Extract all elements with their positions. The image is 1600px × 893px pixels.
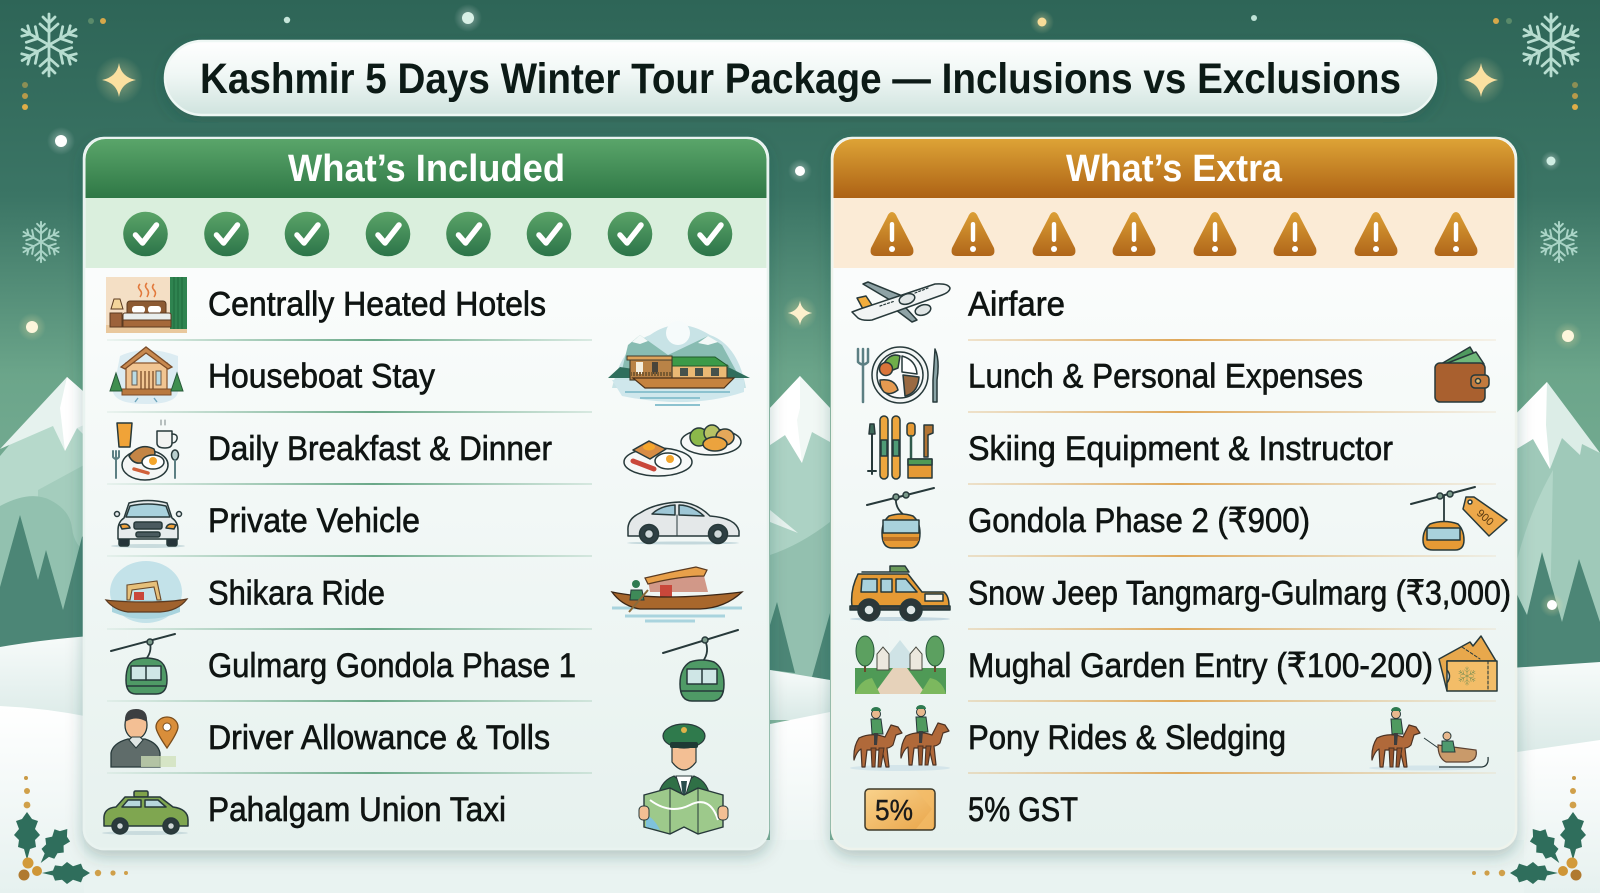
icon: pony riders (850, 705, 950, 771)
item: Pony Rides & Sledging: Pony Rides & Sledging (968, 719, 1286, 757)
item: Skiing Equipment & Instructor: Skiing Equipment & Instructor (968, 430, 1393, 468)
icon: snowflake mid right (1539, 222, 1579, 262)
icon: 5 percent badge: 5% (875, 795, 913, 827)
background snow strip below panels (84, 840, 1524, 893)
icon: shikara with boatman (612, 567, 742, 621)
icon: centre sparkle (783, 296, 817, 330)
icon: gold sparkle left (95, 56, 143, 104)
warning sign strip (834, 198, 1514, 268)
panel: what's extra (832, 138, 1516, 849)
item: Centrally Heated Hotels: Centrally Heated Hotels (208, 286, 546, 324)
check mark strip (86, 198, 766, 268)
icon: breakfast plates (624, 425, 741, 476)
item: Daily Breakfast & Dinner: Daily Breakfast & Dinner (208, 430, 552, 468)
icon: ski equipment (868, 416, 933, 479)
icon: house (110, 347, 183, 404)
icon: houseboat on lake (608, 321, 750, 405)
icon: gondola green (663, 630, 738, 701)
icon: mughal garden (855, 636, 946, 694)
icon: shikara small (106, 561, 187, 623)
icon: holly bottom right (1472, 776, 1586, 884)
background: centre mountain, trees and snow (770, 376, 830, 893)
item: Gulmarg Gondola Phase 1: Gulmarg Gondola Phase 1 (208, 647, 576, 685)
icon: heated hotel room (106, 277, 187, 333)
icon: 5 percent badge (865, 789, 935, 830)
item: Lunch & Personal Expenses: Lunch & Personal Expenses (968, 358, 1363, 396)
icon: gold sparkle right (1457, 56, 1505, 104)
icon: snowflake mid left (21, 222, 61, 262)
decoration: glowing light dots (18, 4, 1582, 617)
icon: silver sedan (627, 502, 739, 544)
item: Private Vehicle: Private Vehicle (208, 502, 420, 540)
icon: green taxi (102, 791, 188, 835)
icon: holly bottom left (14, 776, 128, 884)
item: Houseboat Stay: Houseboat Stay (208, 358, 436, 396)
icon: snowflake top left (18, 14, 80, 76)
icon: gondola orange (867, 488, 934, 548)
panel header: what's included: What’s Included (288, 148, 565, 190)
item: Shikara Ride: Shikara Ride (208, 574, 385, 612)
item: Pahalgam Union Taxi: Pahalgam Union Taxi (208, 791, 506, 829)
item: 5% GST: 5% GST (968, 791, 1078, 829)
panel: what's included (84, 138, 768, 849)
panel header: what's extra (834, 139, 1514, 198)
icon: officer with map (639, 724, 728, 834)
item: Snow Jeep Tangmarg-Gulmarg: Snow Jeep Tangmarg-Gulmarg (₹3,000) (968, 574, 1511, 612)
icon: pony and sled (1369, 707, 1488, 770)
title: Kashmir 5 Days Winter Tour Package — Inclusions vs Exclusions (200, 55, 1401, 103)
background: left mountains, trees and snow (0, 377, 90, 893)
icon: snowflake top right (1520, 14, 1582, 76)
icon: gondola small green (111, 634, 175, 694)
item: Airfare: Airfare (968, 286, 1065, 324)
icon: wallet (1435, 347, 1489, 402)
icon: lunch plate (858, 347, 938, 403)
icon: driver with map pin (111, 709, 178, 767)
icon: airplane (852, 282, 950, 322)
icon: snow jeep (850, 566, 950, 621)
panel header: what's extra: What’s Extra (1066, 148, 1283, 190)
background: right mountains, trees and snow (1510, 382, 1600, 893)
item: Gondola Phase 2: Gondola Phase 2 (₹900) (968, 502, 1310, 540)
icon: gondola with price tag (1411, 487, 1507, 550)
title banner (165, 41, 1436, 115)
panel header: what's included (86, 139, 766, 198)
icon: entry tickets (1439, 636, 1497, 691)
item: Driver Allowance & Tolls: Driver Allowance & Tolls (208, 719, 550, 757)
icon: gondola with price tag: 900 (1474, 507, 1496, 529)
icon: breakfast plate (113, 420, 178, 480)
item: Mughal Garden Entry: Mughal Garden Entry (₹100-200) (968, 647, 1433, 685)
icon: car front (111, 500, 185, 548)
